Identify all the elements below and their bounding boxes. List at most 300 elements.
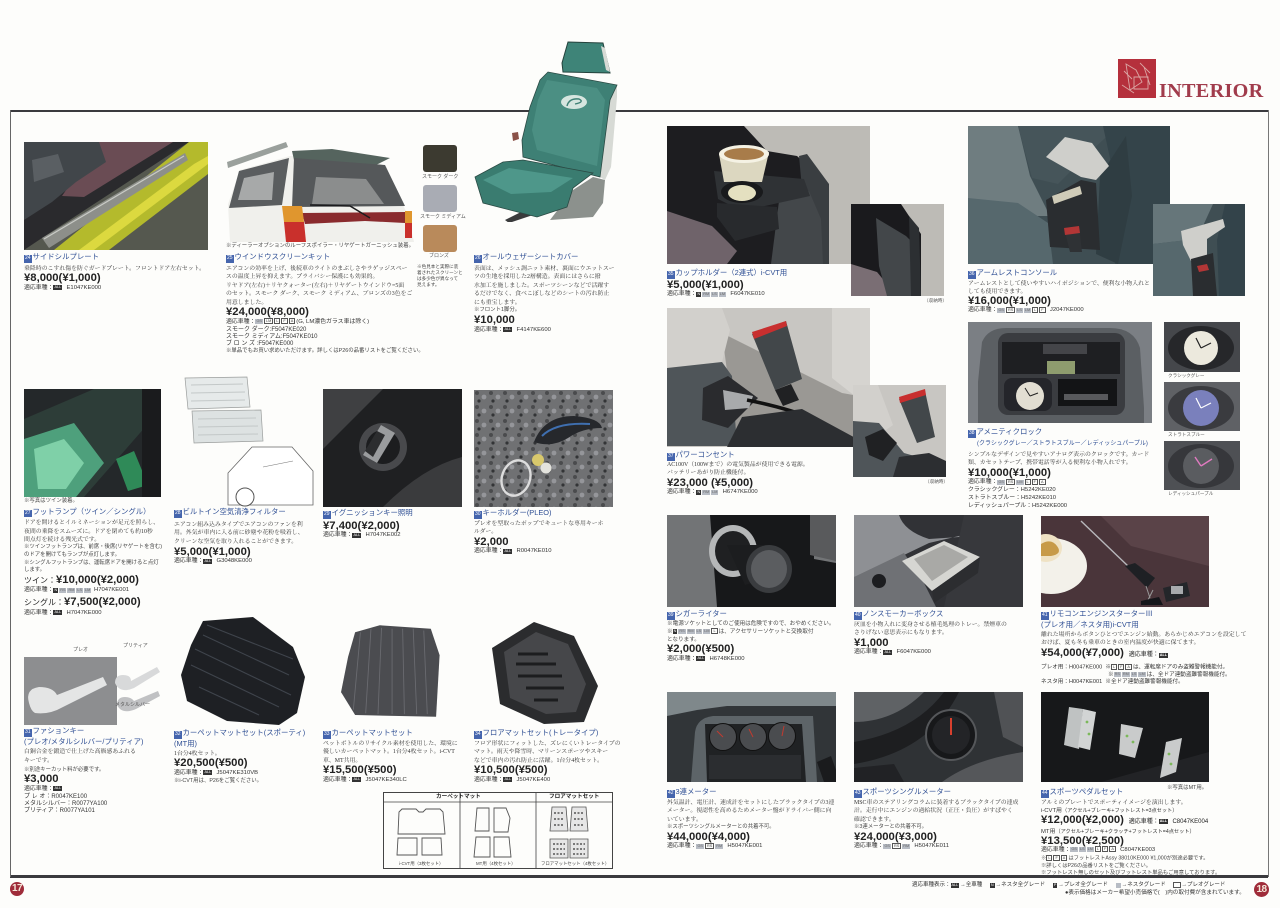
- text: item 40 description: 灰皿を小物入れに変身させる植毛処理のトレー。禁煙車の: [854, 622, 1007, 628]
- text: item 37 description: [667, 450, 809, 497]
- text: item 24 description: 適応車種： E1047KE000: [24, 285, 101, 291]
- text: item 41 description: ネスタ用：H0047KE001 ※全ドア連動盗難警報機能付。: [1041, 679, 1184, 685]
- text: item 25 description: リヤドア(左右)＋リヤクォーター(左右)＋リヤゲートウインドウ=5面: [226, 283, 404, 289]
- text: item 31 description: メタルシルバー：R0077YA100: [24, 801, 107, 807]
- text: item 37 description: LM: [712, 490, 717, 494]
- text: item 27 description: ツイン：¥10,000(¥2,000): [24, 574, 139, 586]
- text: item 38 description: F: [1034, 480, 1036, 484]
- frame rules: [10, 110, 1268, 112]
- text: item 39 description: 39: [668, 612, 674, 618]
- text: item 44 description: i-CVT用（アクセル+ブレーキ+フットレスト=3点セット）: [1041, 808, 1177, 814]
- text: item 32 description: ※i-CVT用は、P26をご覧ください。: [174, 778, 262, 784]
- text: item 24 description: 24: [25, 255, 31, 261]
- text: item 41 description: おけば、夏も冬も乗車のときの室内温度が快適に保てます。: [1041, 640, 1200, 646]
- text: item 33 description: 33: [324, 731, 330, 737]
- text: item 44 description: ¥13,500(¥2,500): [1041, 834, 1124, 846]
- panel: item 25 window screen kit: [226, 142, 424, 354]
- text: item 38 description: アメニティクロック: [976, 427, 1042, 436]
- text: item 39 description: RM: [688, 629, 694, 633]
- text: item 24 description: サイドシルプレート: [32, 252, 99, 261]
- text: item 41 description: F: [1120, 665, 1122, 669]
- text: item 30 description: プレオを型取ったポップでキュートな専用キーホ: [474, 520, 604, 526]
- text: item 25 description: ¥24,000(¥8,000): [226, 306, 309, 318]
- text: item 39 description: ALL: [697, 656, 704, 660]
- text: item 31 description: (プレオ/メタルシルバー/プリティア): [24, 736, 143, 746]
- text: item 32 description: 適応車種： J5047KE310VB: [174, 770, 258, 776]
- caption: reddish purple: レディッシュパープル: [1168, 491, 1213, 496]
- panel: item 27 foot lamp: [24, 389, 162, 616]
- label: smoke medium: スモーク ミディアム: [420, 214, 466, 220]
- text: item 27 description: ※シングルフットランプは、運転席ドアを開けると点灯: [24, 560, 159, 566]
- text: item 42 description: RS: [707, 844, 712, 848]
- text: item 27 description: ドアを開けるとイルミネーションが足元を照らし、: [24, 520, 159, 526]
- photo: aluminium pedals: [1041, 692, 1209, 782]
- diagram: mat outlines: [384, 793, 612, 868]
- text: item 29 description: イグニッションキー照明: [332, 508, 413, 517]
- caption: stowed: （収納時）: [924, 298, 947, 303]
- panel: item 28 air filter: [174, 376, 314, 564]
- text: item 24 description: [24, 252, 205, 291]
- text: item 37 description: パワーコンセント: [676, 450, 735, 459]
- text: item 39 description: N: [674, 629, 676, 633]
- label: pleo key: プレオ: [73, 647, 88, 653]
- legend: applicable model key: N: [991, 882, 994, 886]
- text: item 44 description: ※ はフットレストAssy 38010KE000 ¥1,000が別途必要です。: [1041, 855, 1208, 861]
- photo: rear of white minivan: [227, 142, 414, 242]
- text: item 41 description: (プレオ用／ネスタ用)i-CVT用: [1041, 620, 1139, 628]
- text: item 41 description: L: [1113, 665, 1115, 669]
- panel: item 34 floor mat tray type: [474, 622, 620, 783]
- text: item 31 description: [24, 726, 143, 814]
- text: item 27 description: 適応車種： H7047KE000: [24, 610, 102, 616]
- text: item 34 description: などで車内の汚れ防止に活躍。1台分4枚セット。: [474, 758, 603, 764]
- text: item 38 description: LM: [1017, 480, 1023, 484]
- text: item 36 description: しても使用できます。: [968, 289, 1026, 295]
- text: item 29 description: [323, 508, 413, 538]
- text: item 41 description: 離れた場所からボタンひとつでエンジン始動。あらかじめエアコンを設定して: [1041, 632, 1246, 638]
- text: item 25 description: L: [276, 319, 278, 323]
- text: item 34 description: 34: [475, 731, 481, 737]
- text: item 33 description: ALL: [353, 777, 360, 781]
- text: item 39 description: LM: [704, 629, 709, 633]
- text: item 35 description: カップホルダー（2連式）i-CVT用: [676, 268, 787, 277]
- text: item 34 description: [474, 728, 620, 783]
- text: item 26 description: ALL: [504, 327, 511, 331]
- panel: item 29 ignition key light: [323, 389, 462, 538]
- text: item 29 description: ALL: [353, 532, 360, 536]
- text: item 41 description: LM: [1139, 672, 1145, 676]
- text: item 44 description: MT用（アクセル+ブレーキ+クラッチ+フットレスト=4点セット）: [1041, 828, 1195, 834]
- panel: item 26 all-weather seat cover: [474, 42, 618, 333]
- text: item 42 description: ※スポーツシングルメーターとの共着不可。: [667, 824, 775, 830]
- text: item 28 description: [174, 507, 304, 564]
- text: item 38 description: GS: [998, 480, 1004, 484]
- text: item 32 description: 32: [175, 731, 181, 737]
- chart: mat shape comparison table: [383, 792, 613, 869]
- text: item 28 description: 用。外気が車内に入る前に砂塵や花粉を吸着し、: [174, 530, 304, 536]
- text: item 41 description: RM: [1123, 672, 1129, 676]
- text: item 31 description: キーです。: [24, 758, 53, 764]
- page number 18: 18: [1256, 884, 1267, 895]
- text: item 39 description: RS: [679, 629, 685, 633]
- text: item 36 description: LS: [1017, 308, 1022, 312]
- note: colour sample: 見えます。: [417, 282, 440, 287]
- text: item 30 description: ALL: [504, 549, 511, 553]
- text: item 34 description: マット。雨天や降雪時、マリーンスポーツやスキー: [474, 749, 608, 755]
- text: item 44 description: ¥12,000(¥2,000) 適応車種： C8047KE004: [1041, 814, 1208, 826]
- text: item 40 description: ノンスモーカーボックス: [862, 609, 943, 618]
- text: item 36 description: L: [1034, 308, 1036, 312]
- text: item 27 description: LS: [77, 588, 82, 592]
- text: item 29 description: 適応車種： H7047KE002: [323, 532, 401, 538]
- panel: item 43 sports single meter: [854, 692, 1024, 850]
- text: item 27 description: 適応車種： H7047KE001: [24, 587, 129, 593]
- panel: item 36 armrest console: [968, 126, 1246, 314]
- text: item 35 description: LS: [712, 292, 717, 296]
- text: item 33 description: ペットボトルのリサイクル素材を使用した、環境に: [323, 740, 458, 746]
- text: item 41 description: プレオ用：H0047KE000 ※ は、運転席ドアのみ盗難警報機能付。: [1041, 664, 1228, 670]
- text: item 28 description: ビルトイン空気清浄フィルター: [182, 507, 286, 516]
- panel: item 44 sports pedal set: [1041, 692, 1267, 875]
- panel: item 38 amenity clock: [968, 322, 1242, 512]
- text: item 33 description: カーペットマットセット: [332, 728, 413, 737]
- text: item 35 description: [667, 268, 787, 299]
- table captions: フロアマットセット（4枚セット）: [541, 861, 609, 866]
- text: item 27 description: シングル：¥7,500(¥2,000): [24, 596, 141, 608]
- text: item 44 description: LS: [1080, 847, 1085, 851]
- text: item 27 description: のドアを開けてもランプが点灯します。: [24, 552, 120, 558]
- text: item 31 description: 31: [25, 729, 31, 735]
- text: item 35 description: 適応車種： F6047KE010: [667, 291, 765, 297]
- text: item 42 description: いています。: [667, 817, 702, 823]
- text: item 42 description: 外気温計、電圧計、速成計をセットにしたブラックタイプの3連: [667, 800, 834, 806]
- text: item 44 description: A: [1111, 847, 1114, 851]
- text: item 39 description: ※電源ソケットとしてのご使用は危険ですので、おやめください。: [667, 620, 834, 626]
- photo: remote starter on table: [1041, 516, 1209, 607]
- photo: stowed cup holder inset: [851, 204, 944, 296]
- panel: item 40 non-smoker box: [854, 515, 1024, 657]
- text: item 38 description: ¥10,000(¥1,000): [968, 467, 1051, 479]
- text: item 35 description: N: [697, 292, 700, 296]
- text: item 39 description: [667, 609, 834, 664]
- text: item 34 description: ALL: [504, 777, 511, 781]
- text: item 36 description: アームレストコンソール: [976, 268, 1057, 277]
- text: item 31 description: プ レ オ：R0047KE100: [24, 794, 87, 800]
- text: item 31 description: ALL: [54, 786, 61, 790]
- text: item 39 description: ※ は、アクセサリーソケットと交換取付: [667, 629, 813, 635]
- text: item 31 description: 白銅合金を鍛造で仕上げた高級感あふれる: [24, 748, 136, 754]
- text: item 25 description: スモーク ダーク:F5047KE020: [226, 327, 306, 333]
- table captions: MT用（4枚セット）: [476, 861, 516, 866]
- text: item 31 description: ※別途キーカット料が必要です。: [24, 766, 104, 772]
- text: item 26 description: るだけでなく、食べこぼしなどのシートの汚れ防止: [474, 291, 609, 297]
- text: item 43 description: RM: [903, 844, 909, 848]
- photo: black tray floor mat: [492, 622, 598, 724]
- text: item 25 description: LM: [266, 319, 271, 323]
- text: item 28 description: ¥5,000(¥1,000): [174, 546, 251, 558]
- legend: applicable model key: ALL: [952, 882, 958, 886]
- text: item 30 description: ルダー。: [474, 529, 497, 535]
- text: item 27 description: ALL: [54, 610, 61, 614]
- note: colour sample: [417, 264, 463, 287]
- text: item 43 description: 計。走行中にエンジンの過給状況（正圧・負圧）がすばやく: [854, 808, 1013, 814]
- text: item 32 description: ¥20,500(¥500): [174, 757, 248, 769]
- panel: tint colour swatches: [417, 145, 466, 287]
- page number 17: [10, 882, 24, 896]
- text: item 44 description: L: [1048, 856, 1050, 860]
- text: item 41 description: A: [1127, 665, 1130, 669]
- text: item 30 description: 適応車種： R0047KE010: [474, 548, 552, 554]
- text: item 28 description: クリーンな空気を取り入れることができます。: [174, 539, 297, 545]
- text: item 40 description: [854, 609, 1007, 657]
- photo: foot lamp footwell: [24, 389, 161, 497]
- table captions: i-CVT用（3枚セット）: [399, 861, 443, 866]
- photo: black sporty carpet mat: [181, 617, 305, 725]
- text: item 41 description: ALL: [1160, 653, 1167, 657]
- photo: filters and car diagram: [184, 376, 314, 506]
- text: item 43 description: MSC車のステアリングコラムに装着するブラックタイプの連成: [854, 800, 1018, 806]
- page number 18: [1254, 882, 1269, 897]
- text: item 42 description: 42: [668, 790, 674, 796]
- text: item 43 description: GS: [884, 844, 890, 848]
- text: item 25 description: ※ディーラーオプションのルーフスポイラー・リヤゲートガーニッシュ装着。: [226, 243, 414, 249]
- text: item 40 description: 適応車種： F6047KE000: [854, 649, 931, 655]
- text: item 25 description: ウインドウスクリーンキット: [234, 252, 330, 261]
- text: item 40 description: さりげない意思表示にもなります。: [854, 630, 948, 636]
- text: item 34 description: ¥10,500(¥500): [474, 764, 548, 776]
- panel: item 30 key holder: [474, 390, 613, 554]
- text: item 36 description: RS: [1008, 308, 1013, 312]
- text: item 44 description: F: [1055, 856, 1058, 860]
- text: item 27 description: RS: [60, 588, 65, 592]
- text: item 26 description: にも重宝します。: [474, 300, 521, 306]
- text: item 29 description: ¥7,400(¥2,000): [323, 520, 400, 532]
- text: item 38 description: 38: [969, 430, 975, 436]
- text: item 38 description: ストラトスブルー：H5242KE010: [968, 495, 1056, 501]
- text: item 25 description: エアコンの効率を上げ、後続車のライトのまぶしさやラゲッジスペー: [226, 266, 408, 272]
- text: item 36 description: GS: [998, 308, 1004, 312]
- text: item 26 description: ¥10,000: [474, 314, 515, 326]
- photo: side sill plate: [24, 142, 208, 250]
- text: item 36 description: ¥16,000(¥1,000): [968, 295, 1051, 307]
- text: item 26 description: 26: [475, 255, 481, 261]
- title: INTERIOR: [1159, 80, 1263, 102]
- text: item 37 description: RM: [703, 490, 709, 494]
- table headers: カーペットマット: [436, 794, 481, 800]
- text: item 25 description: F: [283, 319, 286, 323]
- text: item 37 description: ¥23,000 (¥5,000): [667, 477, 753, 489]
- text: item 32 description: カーペットマットセット(スポーティ): [182, 728, 305, 737]
- photo: three fashion keys: [24, 657, 160, 725]
- text: item 25 description: A: [291, 319, 293, 323]
- panel: item 35 cup holder: [667, 126, 944, 304]
- photo: green seat cover: [474, 42, 618, 222]
- photo: non-smoker tray: [854, 515, 1023, 607]
- text: item 38 description: L: [1027, 480, 1029, 484]
- swatch: bronze: [423, 225, 457, 252]
- text: item 41 description: リモコンエンジンスターターⅢ: [1050, 609, 1153, 618]
- text: item 43 description: 確認できます。: [854, 817, 895, 823]
- text: item 25 description: のセット。スモーク ダーク、スモーク ミディアム、ブロンズの3色をご: [226, 291, 412, 297]
- text: item 38 description: 類、カセットテープ、携帯電話等が入る便利な小物入れです。: [968, 460, 1132, 466]
- text: item 43 description: RS: [894, 844, 899, 848]
- text: item 42 description: GS: [697, 844, 703, 848]
- legend: applicable model key: P: [1054, 882, 1056, 886]
- panel: item 41 remote engine starter: [1041, 516, 1267, 686]
- text: item 27 description: 間点灯を続ける残光式です。: [24, 537, 100, 543]
- text: item 35 description: LM: [720, 292, 725, 296]
- text: item 44 description: 44: [1042, 790, 1048, 796]
- text: item 30 description: 30: [475, 511, 481, 517]
- text: item 42 description: メーター。視認性を高めるためメーター盤がドライバー側に向: [667, 808, 831, 814]
- text: item 36 description: [968, 268, 1150, 315]
- text: item 25 description: スの温度上昇を抑えます。プライバシー保護にも効果的。: [226, 274, 378, 280]
- text: item 38 description: 適応車種：: [968, 479, 997, 485]
- text: item 44 description: 適応車種： C8047KE003: [1041, 846, 1155, 852]
- caption: stratos blue: ストラトスブルー: [1168, 432, 1205, 437]
- photo: ignition key: [323, 389, 462, 507]
- note: colour sample: は多少色が異なって: [417, 276, 458, 281]
- photo: grey striped carpet mat: [341, 625, 440, 717]
- table headers: [436, 793, 599, 800]
- legend: applicable model key: ●表示価格はメーカー希望小売価格で( )内の取付費が含まれています。: [1065, 890, 1245, 896]
- text: item 43 description: ※3連メーターとの共着不可。: [854, 824, 927, 830]
- text: item 27 description: 27: [25, 510, 31, 516]
- text: item 25 description: 25: [227, 255, 233, 261]
- photo: three meters: [667, 692, 836, 782]
- text: item 31 description: ¥3,000: [24, 773, 59, 785]
- text: item 25 description: 用意しました。: [226, 300, 267, 306]
- text: item 44 description: L: [1097, 847, 1099, 851]
- text: item 30 description: キーホルダー(PLEO): [482, 508, 552, 517]
- text: item 34 description: フロア形状にフィットした、ズレにくいトレータイプの: [474, 740, 620, 746]
- text: item 41 description: ¥54,000(¥7,000) 適応車種：: [1041, 647, 1159, 659]
- text: item 34 description: フロアマットセット(トレータイプ): [482, 728, 598, 737]
- text: item 30 description: ¥2,000: [474, 536, 509, 548]
- text: item 28 description: 28: [175, 510, 181, 516]
- note: colour sample: 着されたスクリーンと: [417, 270, 463, 275]
- text: item 32 description: [174, 728, 305, 784]
- text: item 32 description: (MT用): [174, 738, 197, 748]
- photo: key holder on granite: [474, 390, 613, 507]
- text: item 34 description: 適応車種： J5047KE400: [474, 777, 550, 783]
- text: item 29 description: 29: [324, 511, 330, 517]
- text: item 32 description: ALL: [204, 770, 211, 774]
- text: item 44 description: [1041, 787, 1220, 878]
- text: item 27 description: [24, 497, 162, 616]
- page number 17: 17: [12, 883, 22, 894]
- text: item 39 description: LS: [697, 629, 701, 633]
- text: item 35 description: 35: [668, 271, 674, 277]
- photo: reddish purple clock: [1164, 441, 1240, 490]
- photo: single meter: [854, 692, 1023, 782]
- text: item 37 description: 37: [668, 453, 674, 459]
- text: item 39 description: L: [713, 629, 716, 633]
- text: item 31 description: プリティア：R0077YA101: [24, 808, 95, 814]
- caption: stowed: （収納時）: [925, 479, 948, 484]
- text: item 36 description: 適応車種： J2047KE000: [968, 307, 1084, 313]
- text: item 43 description: スポーツシングルメーター: [862, 787, 951, 796]
- text: item 42 description: 3連メーター: [676, 787, 717, 796]
- label: bronze: ブロンズ: [429, 253, 449, 259]
- panel: item 24 side sill plate: [24, 142, 208, 291]
- text: item 26 description: [474, 252, 615, 333]
- text: item 35 description: ¥5,000(¥1,000): [667, 278, 744, 290]
- text: item 31 description: 適応車種：: [24, 786, 53, 792]
- text: item 36 description: アームレストとして使いやすいハイポジションで、便利な小物入れと: [968, 280, 1150, 286]
- text: item 28 description: エアコン組み込みタイプでエアコンのファンを利: [174, 522, 303, 528]
- text: item 36 description: F: [1041, 308, 1044, 312]
- text: item 27 description: RM: [68, 588, 74, 592]
- text: item 38 description: シンプルなデザインで見やすいアナログ表示のクロックです。カード: [968, 452, 1149, 458]
- text: item 40 description: ALL: [884, 650, 891, 654]
- swatch: smoke medium: [423, 185, 457, 212]
- text: item 44 description: GS: [1071, 847, 1077, 851]
- legend: applicable model key: [912, 881, 1242, 898]
- photo: armrest console: [968, 126, 1170, 264]
- text: item 26 description: ※フロント1脚分。: [474, 307, 520, 313]
- photo: armrest inset: [1153, 204, 1245, 296]
- text: item 26 description: 適応車種： F4147KE600: [474, 327, 551, 333]
- text: item 40 description: 40: [855, 612, 861, 618]
- text: item 27 description: N: [54, 588, 57, 592]
- text: item 37 description: バッテリーあがり防止機能付。: [667, 470, 749, 476]
- text: item 33 description: ¥15,500(¥500): [323, 764, 396, 776]
- text: item 24 description: ¥8,000(¥1,000): [24, 272, 101, 284]
- text: item 24 description: 乗降時のこすれ傷を防ぐガードプレート。フロントドア左右セット。: [24, 266, 205, 272]
- text: item 33 description: [323, 728, 458, 783]
- photo: outlet inset: [853, 385, 946, 477]
- text: item 41 description: [1041, 609, 1246, 687]
- text: item 25 description: GS: [256, 319, 262, 323]
- text: item 26 description: オールウェザーシートカバー: [482, 252, 578, 261]
- text: item 38 description: RS: [1008, 480, 1013, 484]
- panel: item 37 power outlet: [667, 308, 946, 498]
- label: pritia key: プリティア: [123, 643, 148, 649]
- text: item 44 description: LM: [1088, 847, 1093, 851]
- table captions: [399, 861, 609, 866]
- text: item 44 description: A: [1063, 856, 1065, 860]
- icon: red interior emblem: [1118, 59, 1156, 98]
- label: metal silver key: メタルシルバー: [115, 702, 150, 708]
- text: item 35 description: RM: [703, 292, 709, 296]
- text: item 39 description: 適応車種： H6748KE000: [667, 656, 745, 662]
- text: item 42 description: ¥44,000(¥4,000): [667, 831, 750, 843]
- text: item 44 description: F: [1104, 847, 1106, 851]
- text: item 38 description: クラシックグレー：H5242KE020: [968, 487, 1056, 493]
- text: item 42 description: [667, 787, 834, 851]
- text: item 27 description: ※写真はツイン装着。: [24, 498, 78, 504]
- text: item 28 description: ALL: [204, 559, 211, 563]
- text: item 25 description: スモーク ミディアム:F5047KE010: [226, 334, 318, 340]
- text: item 33 description: 優しいカーペットマット。1台分4枚セット。i-CVT: [323, 749, 455, 755]
- text: item 24 description: ALL: [54, 285, 61, 289]
- text: item 25 description: [226, 242, 424, 354]
- text: item 25 description: ※単品でもお買い求めいただけます。詳しくはP26の品番リストをご覧ください。: [226, 348, 424, 354]
- text: item 43 description: 43: [855, 790, 861, 796]
- text: item 27 description: 夜間の乗降をスムーズに。ドアを閉めても約10秒: [24, 528, 153, 534]
- text: item 38 description: A: [1041, 480, 1044, 484]
- legend: applicable model key: 適応車種表示： →全車種 →ネスタ全グレード →プレオ全グレード →ネスタグレード →プレオグレード: [912, 882, 1225, 888]
- text: item 43 description: [854, 787, 1018, 851]
- text: item 36 description: 36: [969, 271, 975, 277]
- label: smoke dark: スモーク ダーク: [422, 174, 458, 180]
- panel: item 31 fashion key: [24, 642, 160, 814]
- photo: cigar lighter: [667, 515, 836, 607]
- photo: cup holder: [667, 126, 870, 264]
- text: item 38 description: (クラシックグレー／ストラトスブルー／レディッシュパープル): [977, 440, 1148, 446]
- text: item 41 description: RS: [1115, 672, 1120, 676]
